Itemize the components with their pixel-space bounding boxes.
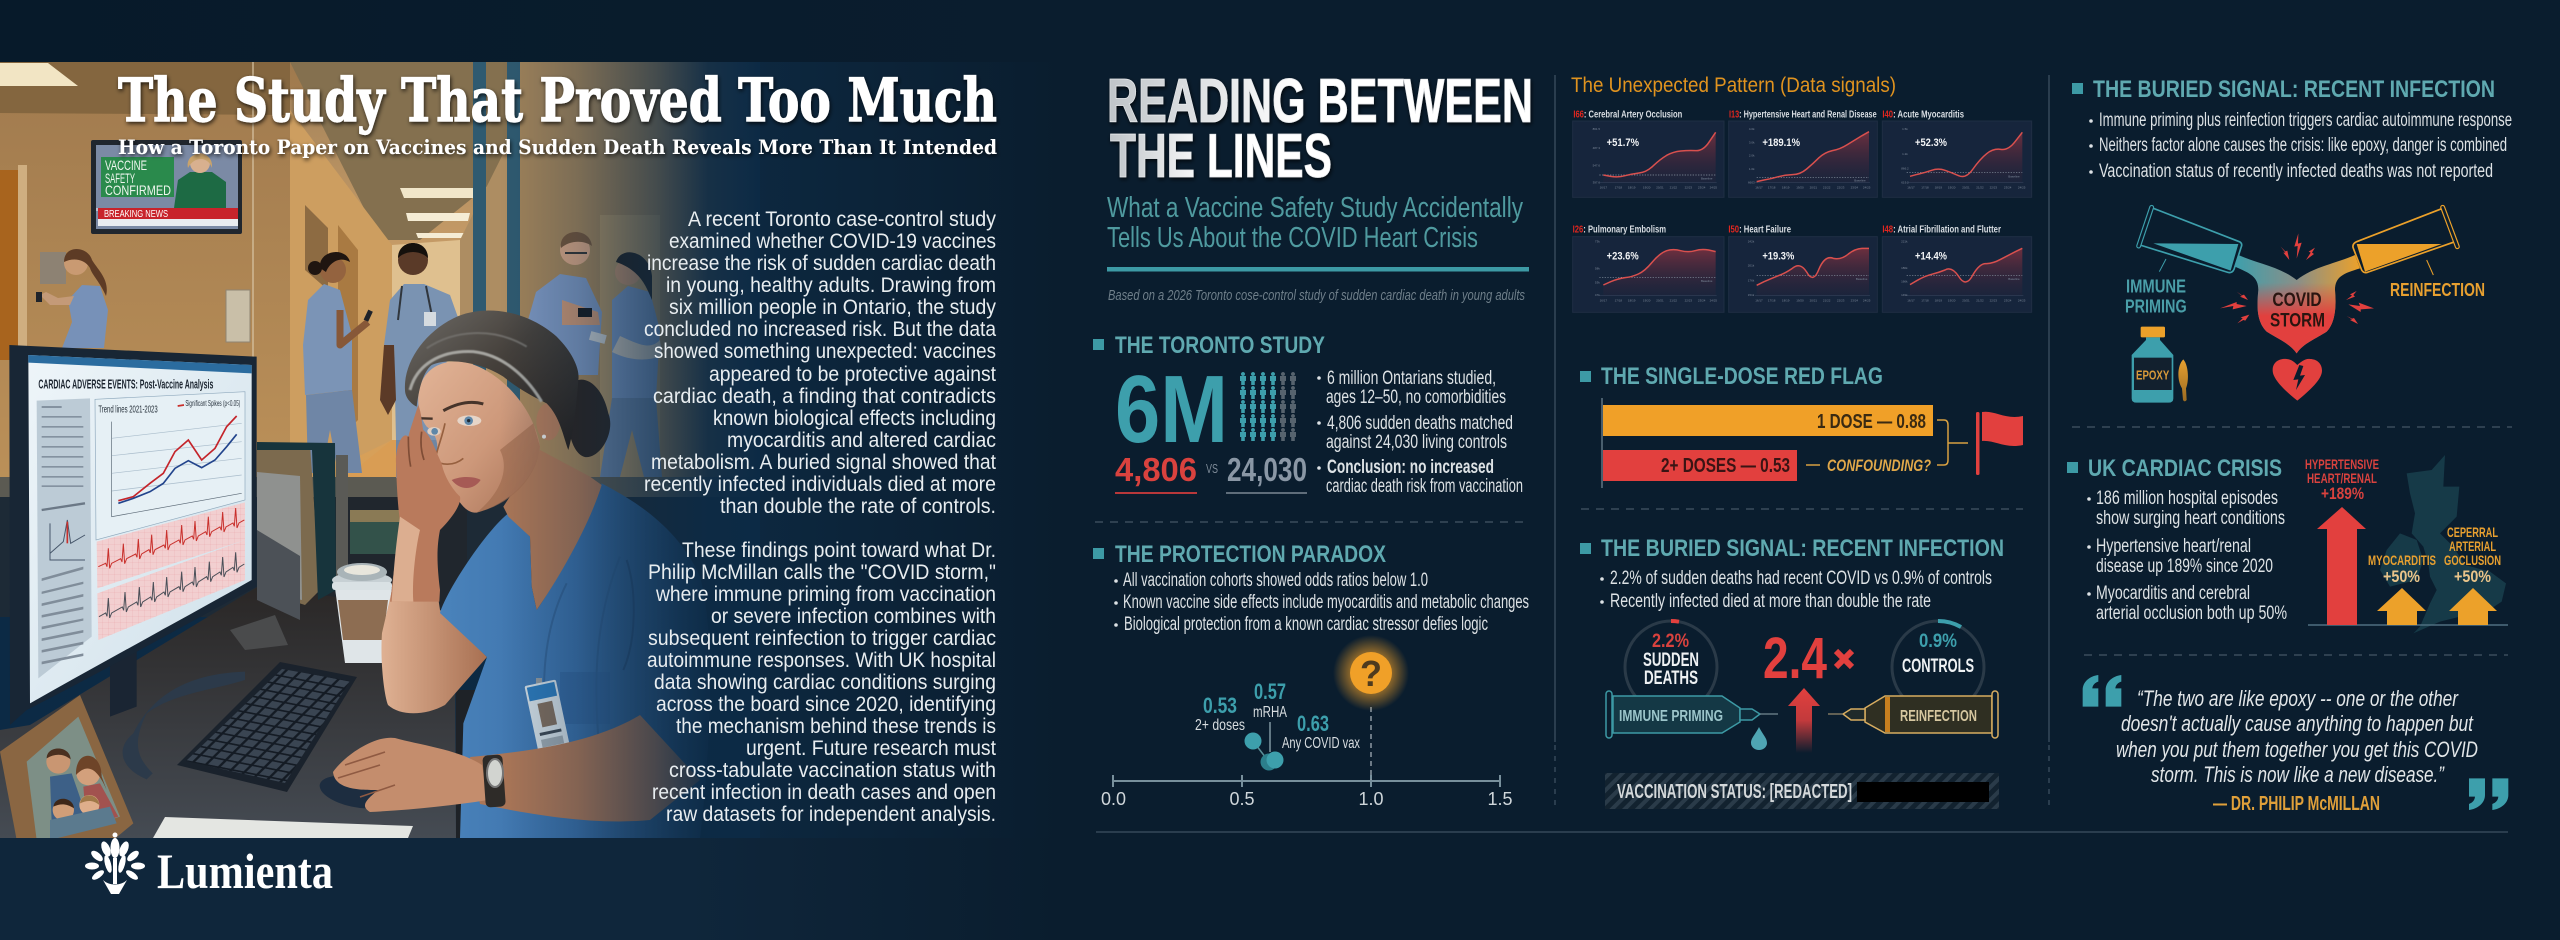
quote attribution: — DR. PHILIP McMILLAN <box>2213 793 2380 815</box>
article text: second paragraph: recent infection in death cases and open <box>652 780 996 804</box>
article text: second paragraph: raw datasets for independent analysis. <box>666 802 996 826</box>
chart: I26 pulmonary embolism: 58k <box>1595 266 1600 270</box>
panel: the single-dose red flag <box>1580 363 2023 488</box>
staff: nurse with phone, left <box>36 249 108 348</box>
chart: I40 acute myocarditis: 1.5k <box>1902 127 1908 131</box>
panel: the buried signal, recent infection (right column) <box>2072 76 2512 403</box>
chart: I40 acute myocarditis: +52.3% <box>1915 137 1947 149</box>
panel: McMillan quote <box>2083 675 2508 815</box>
article text: second paragraph: subsequent reinfection to trigger cardiac <box>648 626 996 650</box>
chart: I26 pulmonary embolism: 24/25 <box>1710 298 1717 302</box>
chart: I48 atrial fibrillation and flutter: 20/21 <box>1962 298 1970 302</box>
chart: I50 heart failure: +19.3% <box>1762 250 1794 262</box>
chart: I13 hypertensive heart and renal disease: 1.0k <box>1749 167 1755 171</box>
stat ring: 0.9% controls: 0.9% <box>1919 631 1957 652</box>
quote text <box>2116 686 2478 787</box>
bullet list: Known vaccine side effects include myocarditis and metabolic changes <box>1123 592 1529 613</box>
column dividers and rules <box>1554 75 1556 742</box>
chart: I66 cerebral artery occlusion: 24/25 <box>1710 185 1717 189</box>
quote text: storm. This is now like a new disease.” <box>2151 762 2445 787</box>
chart: I66 cerebral artery occlusion: 18/19 <box>1628 185 1636 189</box>
chart: I40 acute myocarditis: 18/19 <box>1935 185 1942 189</box>
chart: I40 acute myocarditis: 1.2k <box>1902 152 1908 156</box>
article text: second paragraph: or severe infection combines with <box>711 604 996 628</box>
chart: I26 pulmonary embolism: 23/24 <box>1698 298 1706 302</box>
chart: I50 heart failure: 19/20 <box>1796 298 1804 302</box>
chart: I40 acute myocarditis: 21/22 <box>1976 185 1984 189</box>
article text: first paragraph: appeared to be protective against <box>709 362 996 386</box>
heading: THE TORONTO STUDY <box>1115 332 1325 359</box>
chart: I50 heart failure: 20/21 <box>1810 298 1817 302</box>
chart: rising condition arrows: +50% <box>2383 567 2420 586</box>
chart: I66 cerebral artery occlusion: I66: Cerebral Artery Occlusion <box>1573 109 1682 120</box>
bullet list: 186 million hospital episodes <box>2096 488 2278 509</box>
COVID storm mixing vessel: COVID <box>2272 290 2322 311</box>
chart: I48 atrial fibrillation and flutter: 22/23 <box>1990 298 1997 302</box>
article text: first paragraph: concluded no increased risk. But the data <box>644 317 996 341</box>
article title: The Study That Proved Too Much <box>118 66 997 136</box>
icon: opening quotation mark <box>2083 675 2121 707</box>
chart: I48 atrial fibrillation and flutter: 19/20 <box>1948 298 1956 302</box>
bullet list <box>1114 570 1529 635</box>
chart: odds ratio axis <box>1101 679 1513 809</box>
redacted vaccination status bar <box>1605 773 1999 809</box>
icon: closing quotation mark <box>2469 778 2508 810</box>
stat: 4,806 vs 24,030: 4,806 <box>1115 451 1197 488</box>
chart: I50 heart failure: 16/17 <box>1755 298 1763 302</box>
article text: first paragraph: in young, healthy adults. Drawing from <box>666 273 996 297</box>
chart: I66 cerebral artery occlusion: Baseline <box>1701 176 1713 180</box>
tube: reinfection <box>2353 207 2457 275</box>
wall TV: vaccine safety confirmed: CONFIRMED <box>105 182 171 198</box>
quote text: doesn't actually cause anything to happen but <box>2121 711 2474 736</box>
article text: second paragraph: autoimmune responses. With UK hospital <box>647 648 996 672</box>
chart: I40 acute myocarditis: 24/25 <box>2018 185 2026 189</box>
label: reinfection: REINFECTION <box>2390 279 2485 300</box>
chart: I26 pulmonary embolism: 20/21 <box>1656 298 1664 302</box>
article subtitle: How a Toronto Paper on Vaccines and Sudden Death Reveals More Than It Intended <box>118 135 997 159</box>
chart: I50 heart failure: 18/19 <box>1782 298 1790 302</box>
chart: I66 cerebral artery occlusion: 21/22 <box>1670 185 1677 189</box>
chart: I40 acute myocarditis: 23/24 <box>2004 185 2012 189</box>
article text: first paragraph: increase the risk of sudden cardiac death <box>647 251 996 275</box>
masthead title: THE LINES <box>1110 122 1332 191</box>
icon: syringe, reinfection <box>1828 691 1998 738</box>
diagram: two tubes pour into COVID storm <box>2125 207 2485 403</box>
panel: the buried signal, recent infection (centre column) <box>1580 535 2004 809</box>
panel: infographic masthead <box>1107 67 1533 304</box>
panel: the protection paradox <box>1093 541 1529 809</box>
bullet list: Hypertensive heart/renal <box>2096 536 2251 557</box>
bullet list <box>2089 110 2512 182</box>
chart: I26 pulmonary embolism: +23.6% <box>1607 250 1639 262</box>
masthead subtitle: Tells Us About the COVID Heart Crisis <box>1107 222 1478 254</box>
article text: first paragraph: than double the rate of controls. <box>720 494 996 518</box>
article text: first paragraph: showed something unexpected: vaccines <box>654 339 996 363</box>
staff: nurse with tablet, right <box>589 252 662 477</box>
masthead title <box>1107 67 1533 191</box>
bullet list: cardiac death risk from vaccination <box>1326 476 1523 497</box>
icon: people pictogram <box>1240 372 1296 441</box>
chart: I40 acute myocarditis: 619.2 <box>1901 180 1909 184</box>
article text: second paragraph: These findings point toward what Dr. <box>682 538 996 562</box>
chart: I26 pulmonary embolism: 73k <box>1595 240 1600 244</box>
central figure: woman's head, hair and hand at temple <box>390 310 610 610</box>
chart: odds ratio axis: 0.53 <box>1203 693 1237 718</box>
heading: THE SINGLE-DOSE RED FLAG <box>1601 363 1883 390</box>
chart: I26 pulmonary embolism: 47k <box>1595 293 1600 297</box>
chart: I13 hypertensive heart and renal disease: 17/18 <box>1768 185 1776 189</box>
heading: THE BURIED SIGNAL: RECENT INFECTION <box>1601 535 2004 562</box>
chart: I48 atrial fibrillation and flutter: 149k <box>1901 293 1908 297</box>
illustration: exhausted clinician at cardiac data monitor <box>0 62 760 840</box>
icon: question mark badge <box>1333 635 1409 711</box>
chart: I26 pulmonary embolism: 17/18 <box>1615 298 1622 302</box>
article text: first paragraph: metabolism. A buried signal showed that <box>651 450 996 474</box>
COVID storm mixing vessel: STORM <box>2270 311 2325 332</box>
wall TV: vaccine safety confirmed: VACCINE <box>105 157 147 173</box>
chart: I13 hypertensive heart and renal disease: 20/21 <box>1810 185 1817 189</box>
staff: nurse with phone, corridor <box>303 252 373 473</box>
chart: I13 hypertensive heart and renal disease: 18/19 <box>1782 185 1790 189</box>
chart: rising condition arrows <box>2305 456 2508 625</box>
chart: I13 hypertensive heart and renal disease: Baseline <box>1854 179 1866 183</box>
chart: I48 atrial fibrillation and flutter: +14.4% <box>1915 250 1947 262</box>
map: UK silhouette <box>2380 455 2506 633</box>
chart: I66 cerebral artery occlusion <box>1573 109 1724 197</box>
stat ring: 0.9% controls <box>1892 621 1984 713</box>
article text: first paragraph: known biological effects including <box>713 406 996 430</box>
chart: I13 hypertensive heart and renal disease: 24/25 <box>1863 185 1871 189</box>
chart: I40 acute myocarditis: 17/18 <box>1921 185 1929 189</box>
label: immune priming: IMMUNE <box>2126 276 2186 297</box>
chart: I40 acute myocarditis: 19/20 <box>1948 185 1956 189</box>
masthead subtitle: What a Vaccine Safety Study Accidentally <box>1107 192 1523 224</box>
bullet list: 4,806 sudden deaths matched <box>1327 413 1513 434</box>
chart: I50 heart failure: 23/24 <box>1851 298 1858 302</box>
wall TV: vaccine safety confirmed: SAFETY <box>105 170 135 186</box>
icon: lightning sparks <box>2220 233 2374 324</box>
chart: I26 pulmonary embolism: 53k <box>1595 280 1600 284</box>
bullet list: 6 million Ontarians studied, <box>1327 368 1496 389</box>
staff: doctor with glasses and phone <box>528 232 602 375</box>
chart: I48 atrial fibrillation and flutter: I48: Atrial Fibrillation and Flutter <box>1882 225 2001 236</box>
chart: I13 hypertensive heart and renal disease: 6603 <box>1748 180 1755 184</box>
bullet list: disease up 189% since 2020 <box>2096 556 2273 577</box>
chart: I26 pulmonary embolism: 19/20 <box>1643 298 1651 302</box>
article text: second paragraph: urgent. Future research must <box>746 736 996 760</box>
chart: I26 pulmonary embolism: 18/19 <box>1628 298 1636 302</box>
chart: I13 hypertensive heart and renal disease: 16/17 <box>1755 185 1763 189</box>
icon: epoxy bottle: EPOXY <box>2136 367 2169 382</box>
chart: I48 atrial fibrillation and flutter: 18/19 <box>1935 298 1942 302</box>
chart: small multiples of hospital episodes <box>1573 109 2032 312</box>
bullet list: arterial occlusion both up 50% <box>2096 603 2287 624</box>
chart: I50 heart failure: 201k <box>1748 264 1755 268</box>
article text: first paragraph: examined whether COVID-19 vaccines <box>669 229 996 253</box>
bullet list: show surging heart conditions <box>2096 508 2285 529</box>
chart: I48 atrial fibrillation and flutter: 21/22 <box>1976 298 1984 302</box>
chart: I50 heart failure: 22/23 <box>1837 298 1845 302</box>
stat: 4,806 vs 24,030 <box>1115 451 1307 494</box>
coffee cup <box>332 563 392 663</box>
chart: I13 hypertensive heart and renal disease: +189.1% <box>1762 137 1800 149</box>
chart: I40 acute myocarditis: Baseline <box>2008 174 2020 178</box>
chart: odds ratio axis: 0.5 <box>1229 789 1255 809</box>
stat ring: 2.2% sudden deaths: SUDDEN <box>1643 650 1699 671</box>
chart: odds ratio axis: Any COVID vax <box>1282 735 1360 752</box>
bullet list: All vaccination cohorts showed odds ratios below 1.0 <box>1123 570 1428 591</box>
icon: epoxy bottle <box>2132 327 2173 403</box>
bullet list: Myocarditis and cerebral <box>2096 583 2250 604</box>
chart: I50 heart failure: Baseline <box>1856 277 1868 281</box>
icon: broken heart <box>2273 359 2322 401</box>
chart: I26 pulmonary embolism: 22/23 <box>1685 298 1692 302</box>
chart: I40 acute myocarditis: 16/17 <box>1907 185 1915 189</box>
chart: rising condition arrows: GOCLUSION <box>2444 552 2501 568</box>
chart: rising condition arrows: HYPERTENSIVE <box>2305 456 2379 472</box>
stat: 2.4 times: 2.4 <box>1763 626 1827 691</box>
icon: syringe, immune priming: IMMUNE PRIMING <box>1619 708 1723 725</box>
chart: I26 pulmonary embolism <box>1573 225 1724 312</box>
bullet list <box>2087 488 2287 624</box>
chart: I13 hypertensive heart and renal disease: 4.0k <box>1749 127 1755 131</box>
chart: I66 cerebral artery occlusion: +51.7% <box>1607 137 1639 149</box>
family photo frame <box>0 695 133 840</box>
article text: second paragraph: the mechanism behind these trends is <box>676 714 996 738</box>
article text: first paragraph: myocarditis and altered cardiac <box>727 428 996 452</box>
article text: first paragraph: cardiac death, a finding that contradicts <box>653 384 996 408</box>
heading: THE PROTECTION PARADOX <box>1115 541 1386 568</box>
chart: rising condition arrows: +189% <box>2321 484 2364 503</box>
label: immune priming <box>2125 276 2187 316</box>
chart: dose bars: 2+ DOSES — 0.53 <box>1661 455 1790 477</box>
article text: first paragraph: recently infected individuals died at more <box>644 472 996 496</box>
chart: I48 atrial fibrillation and flutter: 186k <box>1901 266 1908 270</box>
bullet list: ages 12–50, no comorbidities <box>1326 387 1506 408</box>
dashboard title: CARDIAC ADVERSE EVENTS: Post-Vaccine Analysis <box>38 376 213 391</box>
chart: I66 cerebral artery occlusion: 397.6 <box>1593 180 1600 184</box>
chart: I66 cerebral artery occlusion: 22/23 <box>1685 185 1692 189</box>
chart: I13 hypertensive heart and renal disease: I13: Hypertensive Heart and Renal Disease <box>1729 109 1877 120</box>
masthead subtitle <box>1107 192 1523 254</box>
chart: I40 acute myocarditis: 20/21 <box>1962 185 1970 189</box>
chart: I26 pulmonary embolism: Baseline <box>1701 279 1713 283</box>
chair behind desk <box>456 690 475 838</box>
chart: I66 cerebral artery occlusion: 16/17 <box>1600 185 1607 189</box>
chart: I13 hypertensive heart and renal disease: 2.0k <box>1749 154 1755 158</box>
stat ring: 2.2% sudden deaths: DEATHS <box>1644 668 1698 689</box>
article text: second paragraph: data showing cardiac conditions surging <box>654 670 996 694</box>
chart: rising condition arrows: +50% <box>2454 567 2491 586</box>
panel: the Toronto study <box>1093 332 1523 497</box>
keyboard <box>177 662 357 792</box>
tube: immune priming <box>2139 207 2242 273</box>
bullet list: 2.2% of sudden deaths had recent COVID vs 0.9% of controls <box>1610 568 1992 589</box>
article text: second paragraph: cross-tabulate vaccination status with <box>669 758 996 782</box>
chart: I66 cerebral artery occlusion: 487.3 <box>1593 146 1600 150</box>
chart: I13 hypertensive heart and renal disease: 23/24 <box>1851 185 1858 189</box>
bullet list: Biological protection from a known cardiac stressor defies logic <box>1124 614 1488 635</box>
staff: male doctor with stethoscope <box>380 243 466 478</box>
chart: I13 hypertensive heart and renal disease: 22/23 <box>1837 185 1845 189</box>
chart: I40 acute myocarditis <box>1882 109 2032 197</box>
chart: odds ratio axis: 1.5 <box>1487 789 1513 809</box>
redacted vaccination status bar: VACCINATION STATUS: [REDACTED] <box>1617 781 1852 803</box>
stat ring: 0.9% controls: CONTROLS <box>1902 656 1974 677</box>
article text: second paragraph <box>647 538 996 826</box>
stat ring: 2.2% sudden deaths: 2.2% <box>1652 631 1689 652</box>
big stat: 6M: 6M <box>1115 356 1228 463</box>
article text: second paragraph: where immune priming from vaccination <box>655 582 996 606</box>
scrubs shirt and name badge <box>440 483 710 838</box>
label: immune priming: PRIMING <box>2125 295 2187 316</box>
chart: I50 heart failure: 242k <box>1748 240 1755 244</box>
chart: I66 cerebral artery occlusion: 861.5 <box>1593 127 1600 131</box>
stat ring: 2.2% sudden deaths <box>1625 621 1717 713</box>
bullet list <box>1317 368 1523 497</box>
stat: 4,806 vs 24,030: VS <box>1206 461 1218 476</box>
article text: second paragraph: across the board since 2020, identifying <box>656 692 996 716</box>
heading: UK CARDIAC CRISIS <box>2088 455 2282 482</box>
chart: I50 heart failure: 151k <box>1748 293 1755 297</box>
chart: rising condition arrows: HEART/RENAL <box>2307 470 2377 486</box>
chart: odds ratio axis: 0.0 <box>1101 789 1126 809</box>
chart: I40 acute myocarditis: 22/23 <box>1990 185 1997 189</box>
chart: I66 cerebral artery occlusion: 23/24 <box>1698 185 1706 189</box>
chart: rising condition arrows: CEPERRAL <box>2447 524 2498 540</box>
stat: 4,806 vs 24,030: 24,030 <box>1227 451 1307 488</box>
chart: I13 hypertensive heart and renal disease: 19/20 <box>1796 185 1804 189</box>
chart: I48 atrial fibrillation and flutter <box>1882 225 2032 312</box>
bullet list: against 24,030 living controls <box>1326 432 1507 453</box>
chart: I48 atrial fibrillation and flutter: 16/17 <box>1907 298 1915 302</box>
icon: red flag <box>1976 412 2023 475</box>
phone charger on desk <box>230 615 288 650</box>
article text: first paragraph <box>644 207 996 518</box>
chart: I48 atrial fibrillation and flutter: 17/18 <box>1921 298 1929 302</box>
monitor with cardiac adverse events dashboard: Trend lines 2021-2023 <box>98 405 158 416</box>
forearm resting on desk <box>381 590 487 713</box>
chart: I48 atrial fibrillation and flutter: 221k <box>1901 240 1908 244</box>
chart: I66 cerebral artery occlusion: 17/18 <box>1615 185 1622 189</box>
chart: rising condition arrows: ARTERIAL <box>2449 538 2496 554</box>
panel: UK cardiac crisis <box>2067 455 2508 633</box>
article text: first paragraph: A recent Toronto case-control study <box>688 207 996 231</box>
icon: epoxy drip <box>2178 359 2188 401</box>
wall TV: vaccine safety confirmed <box>91 140 242 234</box>
chart: I13 hypertensive heart and renal disease: 3.0k <box>1749 140 1755 144</box>
chart: odds ratio axis: 2+ doses <box>1195 717 1245 734</box>
chart: I13 hypertensive heart and renal disease: 21/22 <box>1823 185 1831 189</box>
article text: first paragraph: six million people in Ontario, the study <box>669 295 996 319</box>
chart: I48 atrial fibrillation and flutter: Baseline <box>2008 277 2020 281</box>
logo: Lumienta <box>85 832 333 899</box>
chart: I26 pulmonary embolism: 21/22 <box>1670 298 1677 302</box>
chart: I50 heart failure: 176k <box>1748 278 1755 282</box>
chart: I50 heart failure: 24/25 <box>1863 298 1871 302</box>
hand on mouse with wristwatch <box>317 715 700 821</box>
chart: I40 acute myocarditis: I40: Acute Myocarditis <box>1882 109 1964 120</box>
chart: odds ratio axis: mRHA <box>1253 704 1287 721</box>
chart: I26 pulmonary embolism: I26: Pulmonary Embolism <box>1573 225 1666 236</box>
navy fade over the scene <box>500 62 760 838</box>
chart: I50 heart failure: 17/18 <box>1768 298 1776 302</box>
chart: I40 acute myocarditis: 866.2 <box>1901 166 1909 170</box>
bullet list: Recently infected died at more than double the rate <box>1610 591 1931 612</box>
COVID storm mixing vessel <box>2235 255 2360 353</box>
masthead title: READING BETWEEN <box>1107 67 1533 136</box>
quote text: “The two are like epoxy -- one or the other <box>2137 686 2459 711</box>
desk with shelves and folders <box>0 442 467 838</box>
monitor with cardiac adverse events dashboard <box>9 345 257 779</box>
icon: flourish emblem <box>85 832 145 894</box>
heading: The Unexpected Pattern (Data signals) <box>1571 74 1896 97</box>
icon: upward arrow <box>1788 688 1820 753</box>
source note: Based on a 2026 Toronto cose-control study of sudden cardiac death in young adults <box>1108 287 1525 304</box>
chart: I50 heart failure <box>1728 225 1877 312</box>
chart: odds ratio axis: 1.0 <box>1358 789 1384 809</box>
chart: I26 pulmonary embolism: 16/17 <box>1600 298 1607 302</box>
monitor with cardiac adverse events dashboard: Significant Spikes (p<0.05) <box>185 399 241 408</box>
icon: syringe, immune priming <box>1606 691 1778 750</box>
chart: dose bars <box>1602 398 1968 488</box>
bullet list <box>1600 568 1992 612</box>
chart: I66 cerebral artery occlusion: 547.6 <box>1593 164 1600 168</box>
wall TV: vaccine safety confirmed: BREAKING NEWS <box>104 209 168 220</box>
icon: syringe, reinfection: REINFECTION <box>1900 708 1977 725</box>
papers on desk <box>153 817 413 838</box>
chart: dose bars: CONFOUNDING? <box>1827 456 1931 475</box>
chart: odds ratio axis: 0.57 <box>1254 679 1286 704</box>
chart: I48 atrial fibrillation and flutter: 24/25 <box>2018 298 2026 302</box>
panel: the unexpected pattern data signals <box>1571 74 2032 312</box>
chart: I66 cerebral artery occlusion: 20/21 <box>1656 185 1664 189</box>
chart: I48 atrial fibrillation and flutter: 23/24 <box>2004 298 2012 302</box>
chart: I50 heart failure: I50: Heart Failure <box>1728 225 1791 236</box>
chart: I66 cerebral artery occlusion: 19/20 <box>1643 185 1651 189</box>
background: hospital wall and corridor <box>0 62 760 617</box>
icon: question mark badge: ? <box>1360 653 1382 694</box>
chart: I48 atrial fibrillation and flutter: 166k <box>1901 280 1908 284</box>
chart: I13 hypertensive heart and renal disease <box>1729 109 1877 197</box>
wordmark: Lumienta <box>157 843 333 899</box>
chart: rising condition arrows: MYOCARDITIS <box>2368 552 2436 568</box>
bullet list: Conclusion: no increased <box>1327 457 1494 478</box>
chart: dose bars: 1 DOSE — 0.88 <box>1817 411 1926 433</box>
chart: I50 heart failure: 21/22 <box>1823 298 1831 302</box>
chart: odds ratio axis: 0.63 <box>1297 711 1329 736</box>
article text: second paragraph: Philip McMillan calls the "COVID storm," <box>648 560 996 584</box>
